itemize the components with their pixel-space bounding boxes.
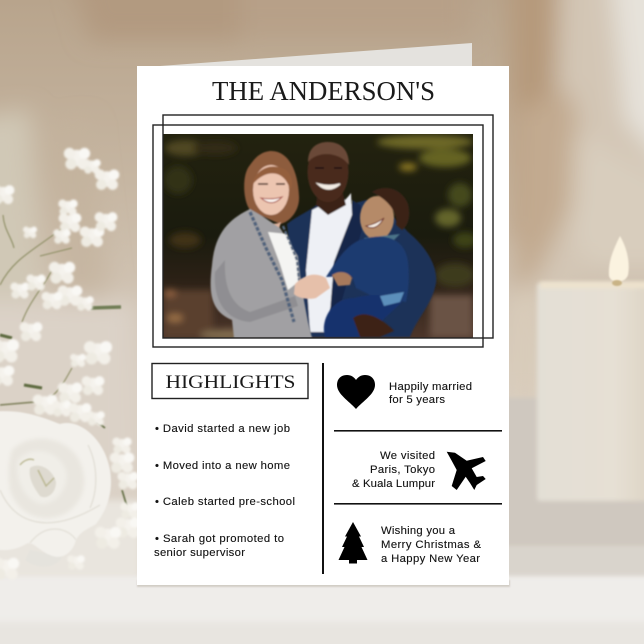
divider line 1 — [334, 430, 502, 432]
candle with flame — [537, 236, 644, 501]
highlights list: • David started a new job — [155, 423, 290, 435]
highlights list: • Sarah got promoted to — [155, 533, 284, 545]
card back flap — [160, 43, 472, 66]
travel text: Paris, Tokyo — [370, 464, 435, 476]
family photo — [163, 134, 477, 341]
highlights list: senior supervisor — [154, 547, 245, 559]
card front panel — [137, 66, 509, 585]
travel text: We visited — [380, 450, 435, 462]
christmas text: a Happy New Year — [381, 553, 480, 565]
divider line 2 — [334, 503, 502, 505]
panel divider vertical — [322, 363, 324, 574]
travel text — [352, 450, 435, 490]
marriage text — [389, 381, 472, 406]
title: THE ANDERSON'S — [212, 76, 435, 106]
double offset frames — [153, 115, 493, 347]
card shadow — [137, 580, 510, 587]
marriage text: for 5 years — [389, 394, 445, 406]
highlights list: • Caleb started pre-school — [155, 496, 295, 508]
flowers: white rose and baby's breath — [0, 148, 140, 580]
icon: heart — [337, 375, 375, 409]
child — [324, 188, 409, 337]
highlights heading box — [152, 364, 308, 398]
highlights list: • Moved into a new home — [155, 460, 290, 472]
christmas text — [381, 525, 481, 565]
white rose — [0, 411, 111, 567]
icon: christmas tree — [338, 522, 368, 564]
man — [287, 142, 436, 337]
woman — [211, 151, 330, 338]
travel text: & Kuala Lumpur — [352, 478, 435, 490]
highlights heading box: HIGHLIGHTS — [166, 373, 296, 393]
christmas text: Wishing you a — [381, 525, 456, 537]
highlights list — [154, 423, 295, 559]
table surface — [0, 398, 644, 644]
marriage text: Happily married — [389, 381, 472, 393]
christmas text: Merry Christmas & — [381, 539, 481, 551]
icon: airplane — [447, 452, 486, 490]
